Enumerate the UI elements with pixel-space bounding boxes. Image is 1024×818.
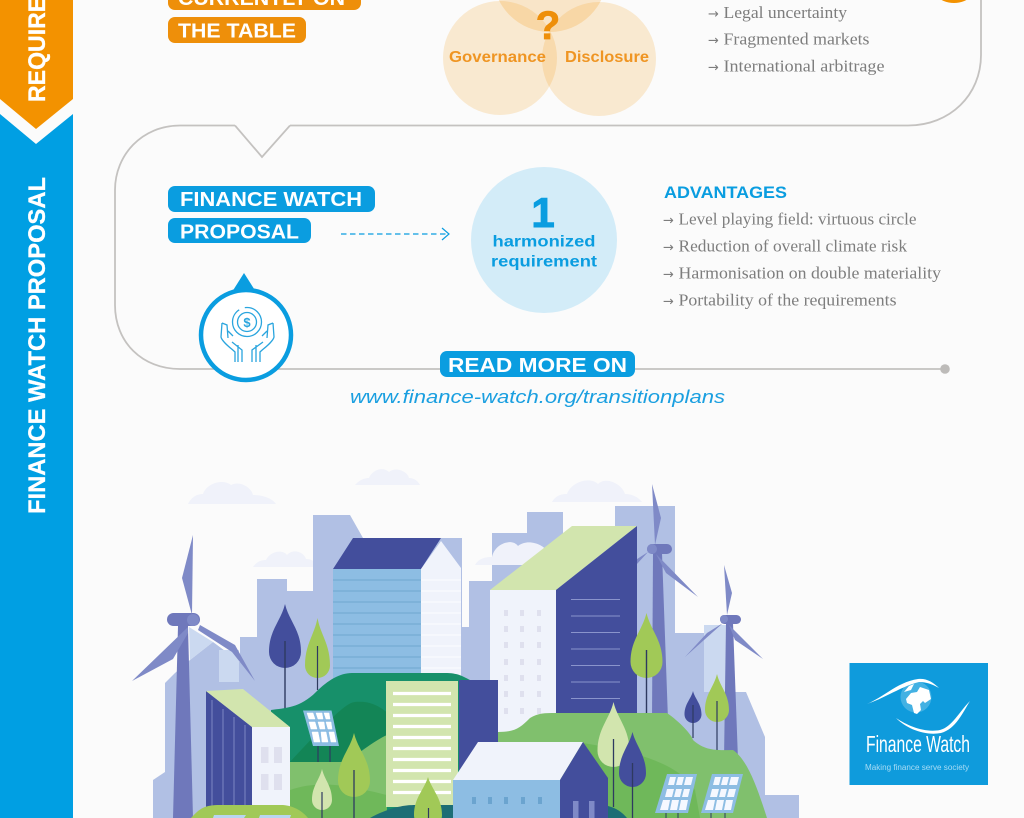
trees in front of hills (312, 733, 370, 818)
icon: hands holding coin (201, 273, 291, 380)
venn diagram: Governance (449, 49, 546, 66)
venn diagram: Disclosure (565, 49, 649, 66)
heading: finance watch proposal: PROPOSAL (180, 220, 299, 244)
text block: advantages: → (663, 240, 674, 256)
dark green hill (271, 673, 470, 818)
text block: disadvantages (708, 3, 884, 76)
light building pieces (189, 625, 730, 692)
read more on label: READ MORE ON (448, 354, 627, 377)
text block: advantages: → (663, 294, 674, 310)
teal mound (370, 805, 453, 818)
text block: advantages: Portability of the requirements (678, 290, 896, 310)
text block: advantages: Harmonisation on double materiality (678, 264, 942, 282)
venn diagram (443, 0, 656, 116)
heading: currently on the table (168, 0, 361, 43)
heading: currently on the table: THE TABLE (178, 20, 296, 42)
circle: 1 harmonized requirement (471, 167, 617, 313)
panel: currently on the table outline (290, 0, 981, 126)
text block: advantages (663, 183, 942, 310)
tree by striped building (414, 777, 442, 818)
logo eye swooshes (867, 679, 970, 734)
striped building (386, 681, 458, 807)
text block: advantages: Reduction of overall climate risk (678, 236, 908, 256)
trees behind hills (269, 604, 729, 750)
sidebar: finance watch proposal: FINANCE WATCH PROPOSAL (24, 177, 51, 514)
heading: finance watch proposal (168, 186, 375, 244)
wind turbine 2 (620, 484, 698, 720)
link: website url: www.finance-watch.org/transitionplans (350, 386, 725, 407)
heading: finance watch proposal: FINANCE WATCH (180, 188, 362, 211)
small trunk (428, 808, 430, 818)
illustration: green city (132, 469, 799, 818)
end dot of outline (940, 364, 950, 374)
sidebar: requirements (0, 0, 73, 129)
light green hill (290, 735, 387, 818)
trees beside blue house (598, 702, 646, 818)
text block: disadvantages: → (708, 7, 719, 22)
wind turbine 1 (132, 535, 255, 818)
venn diagram: ? (536, 4, 560, 48)
logo: finance watch: Finance Watch (866, 731, 970, 757)
left house (206, 689, 290, 807)
text block: advantages: ADVANTAGES (664, 183, 787, 202)
orange circle, partly cropped (927, 0, 981, 3)
blue house (453, 742, 608, 818)
text block: disadvantages: → (708, 34, 719, 48)
text block: advantages: Level playing field: virtuous circle (678, 210, 916, 228)
logo globe (900, 682, 932, 714)
solar panels right (655, 774, 743, 818)
circle: 1 harmonized requirement: requirement (491, 254, 598, 270)
circle: 1 harmonized requirement: 1 (531, 189, 555, 236)
text block: disadvantages: Legal uncertainty (724, 3, 848, 22)
text block: disadvantages: International arbitrage (724, 56, 884, 76)
text block: advantages: → (663, 214, 674, 228)
sidebar: finance watch proposal (0, 114, 73, 818)
cloud over skyline (475, 542, 547, 565)
logo: finance watch: Making finance serve society (865, 763, 969, 772)
text block: disadvantages: Fragmented markets (724, 30, 870, 48)
dark navy block (459, 680, 498, 772)
clouds (188, 469, 642, 567)
text block: disadvantages: → (708, 60, 719, 76)
wind turbine 3 (685, 565, 763, 760)
solar panel on hill (303, 710, 339, 762)
right hill (498, 713, 767, 818)
text block: advantages: → (663, 268, 674, 282)
blue tower (333, 538, 461, 680)
arrow: dashed (341, 228, 449, 240)
panel: finance watch proposal outline (115, 126, 945, 369)
skyline (153, 506, 799, 818)
icon: hands holding coin: $ (243, 315, 251, 330)
green mound with solar panels (191, 805, 308, 818)
logo: finance watch (850, 663, 988, 785)
circle: 1 harmonized requirement: harmonized (492, 234, 596, 250)
tall building (490, 526, 637, 732)
